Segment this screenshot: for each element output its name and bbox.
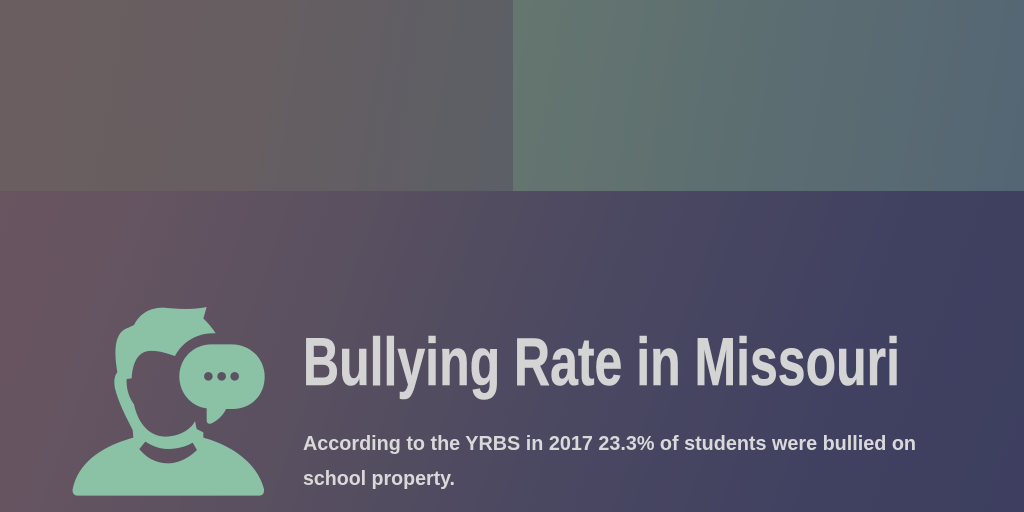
icon part: speech bubble [179,344,265,424]
text block: description: According to the YRBS in 2017 23.3% of students were bullied on [303,433,916,455]
icon part: head, hair and shoulders [73,307,264,496]
text block: description [303,433,916,490]
icon: person with speech bubble [73,307,265,496]
text block: description: school property. [303,468,455,490]
panel: top left image placeholder [0,0,513,191]
panel: top right image placeholder [513,0,1024,191]
icon part: bubble dots [204,372,239,381]
